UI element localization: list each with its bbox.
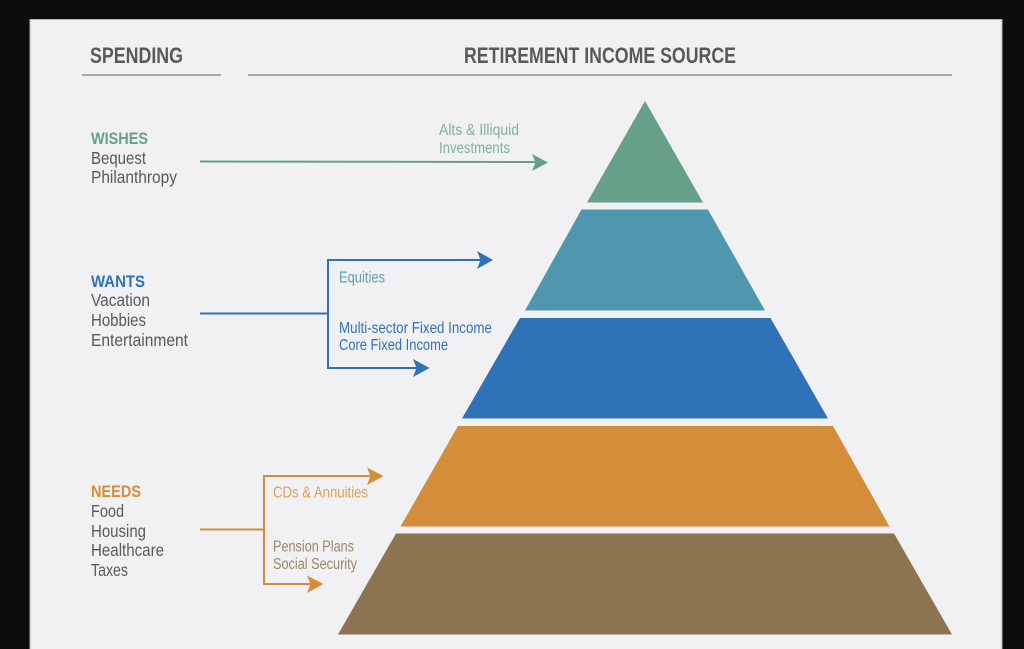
heading: spending: SPENDING (90, 43, 183, 68)
panel: needs spending list: Food (91, 501, 124, 521)
panel: wishes spending list: WISHES (91, 129, 148, 148)
label: alts and illiquid investments: Investments (439, 140, 510, 157)
label: alts and illiquid investments (439, 122, 519, 157)
panel: needs spending list: Housing (91, 521, 146, 541)
panel: needs spending list: Taxes (91, 560, 128, 580)
panel: needs spending list: NEEDS (91, 482, 141, 501)
arrow: wishes to alternatives (200, 154, 548, 171)
panel: wants spending list: WANTS (91, 272, 145, 291)
pyramid tier: equities (525, 210, 765, 310)
panel: needs spending list: Healthcare (91, 540, 164, 560)
pyramid tier: CDs and annuities (400, 426, 890, 526)
label: pension plans and social security (273, 538, 357, 573)
pyramid tier: alternatives (587, 101, 703, 202)
panel: wants spending list: Vacation (91, 290, 150, 310)
label: equities: Equities (339, 270, 385, 286)
panel: wants spending list (91, 272, 188, 350)
panel: wants spending list: Entertainment (91, 330, 188, 350)
heading: retirement income source: RETIREMENT INCOME SOURCE (464, 43, 736, 68)
pyramid tier: pensions and social security (338, 534, 952, 634)
arrow: wants branching to equities and fixed income (200, 251, 493, 377)
label: CDs and annuities: CDs & Annuities (273, 484, 368, 502)
panel: wishes spending list: Philanthropy (91, 167, 177, 187)
pyramid tier: fixed income (462, 318, 828, 418)
panel: wishes spending list (91, 129, 177, 187)
label: fixed income: Multi-sector Fixed Income (339, 320, 492, 337)
panel: needs spending list (91, 482, 164, 580)
label: pension plans and social security: Social Security (273, 556, 357, 573)
label: pension plans and social security: Pension Plans (273, 538, 354, 556)
label: fixed income: Core Fixed Income (339, 337, 448, 354)
label: alts and illiquid investments: Alts & Illiquid (439, 122, 519, 139)
panel: wishes spending list: Bequest (91, 148, 146, 168)
arrow: needs branching to annuities and pensions (200, 468, 384, 593)
pyramid chart (338, 101, 952, 634)
heading: spending (82, 43, 221, 75)
label: fixed income (339, 320, 492, 354)
panel: wants spending list: Hobbies (91, 310, 146, 330)
